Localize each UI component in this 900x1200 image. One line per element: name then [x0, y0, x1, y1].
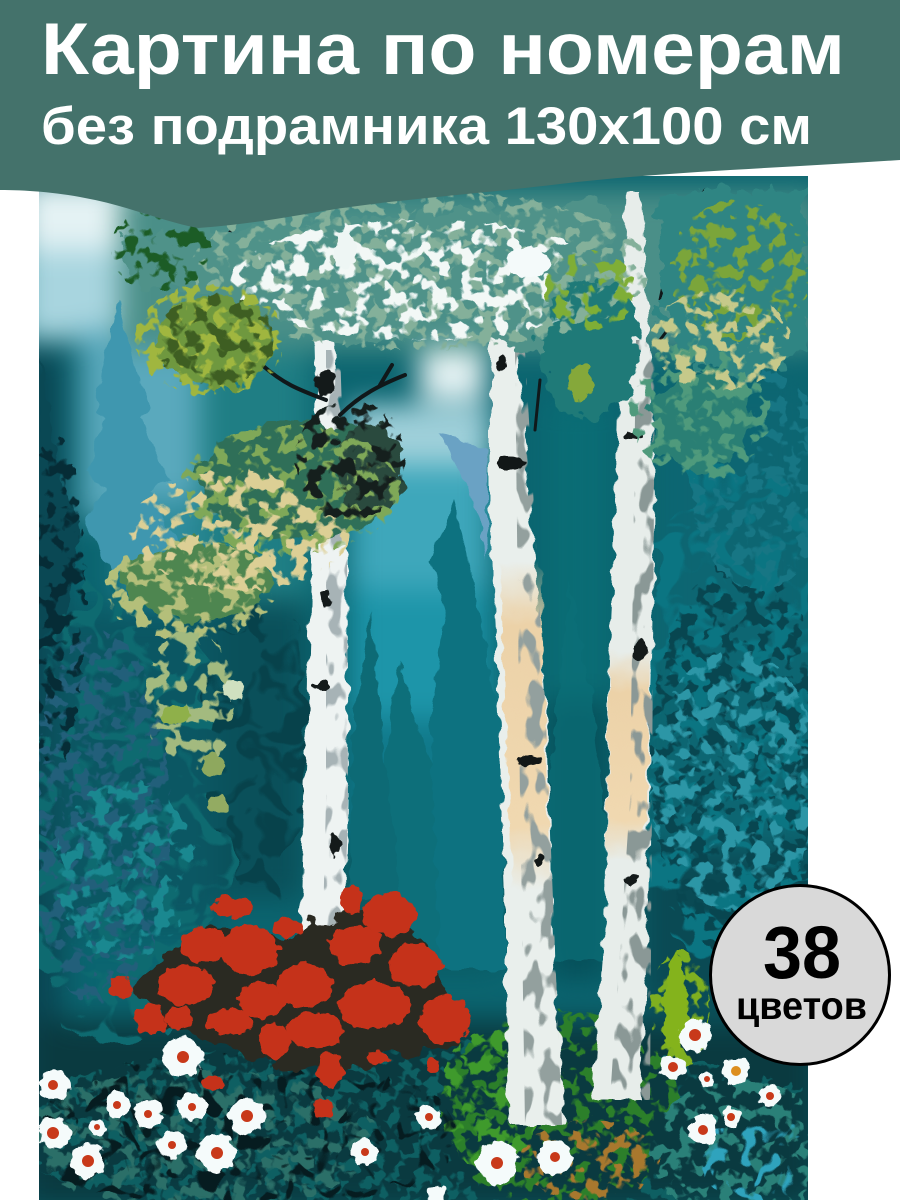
- birch trunk right: [592, 190, 655, 1100]
- red flowering bush: [108, 886, 471, 1118]
- ground grass and undergrowth: [0, 950, 850, 1200]
- badge: 38 colours: [710, 886, 890, 1064]
- header banner: [0, 0, 900, 228]
- dark and light forest mottling: [10, 370, 850, 1050]
- badge: 38 colours: цветов: [736, 985, 867, 1028]
- badge: 38 colours: 38: [763, 911, 841, 994]
- title: [41, 9, 845, 156]
- birch trunk centre: [490, 290, 565, 1125]
- tree branches: [205, 190, 705, 430]
- painting background: [0, 176, 820, 1200]
- misty spruce silhouettes: [39, 300, 606, 970]
- title: Картина по номерам: [41, 9, 845, 90]
- white daisies: [39, 1019, 781, 1200]
- subtitle: без подрамника 130x100 см: [41, 97, 812, 156]
- birch trunk left: [298, 338, 352, 931]
- foliage canopy top: [105, 190, 810, 814]
